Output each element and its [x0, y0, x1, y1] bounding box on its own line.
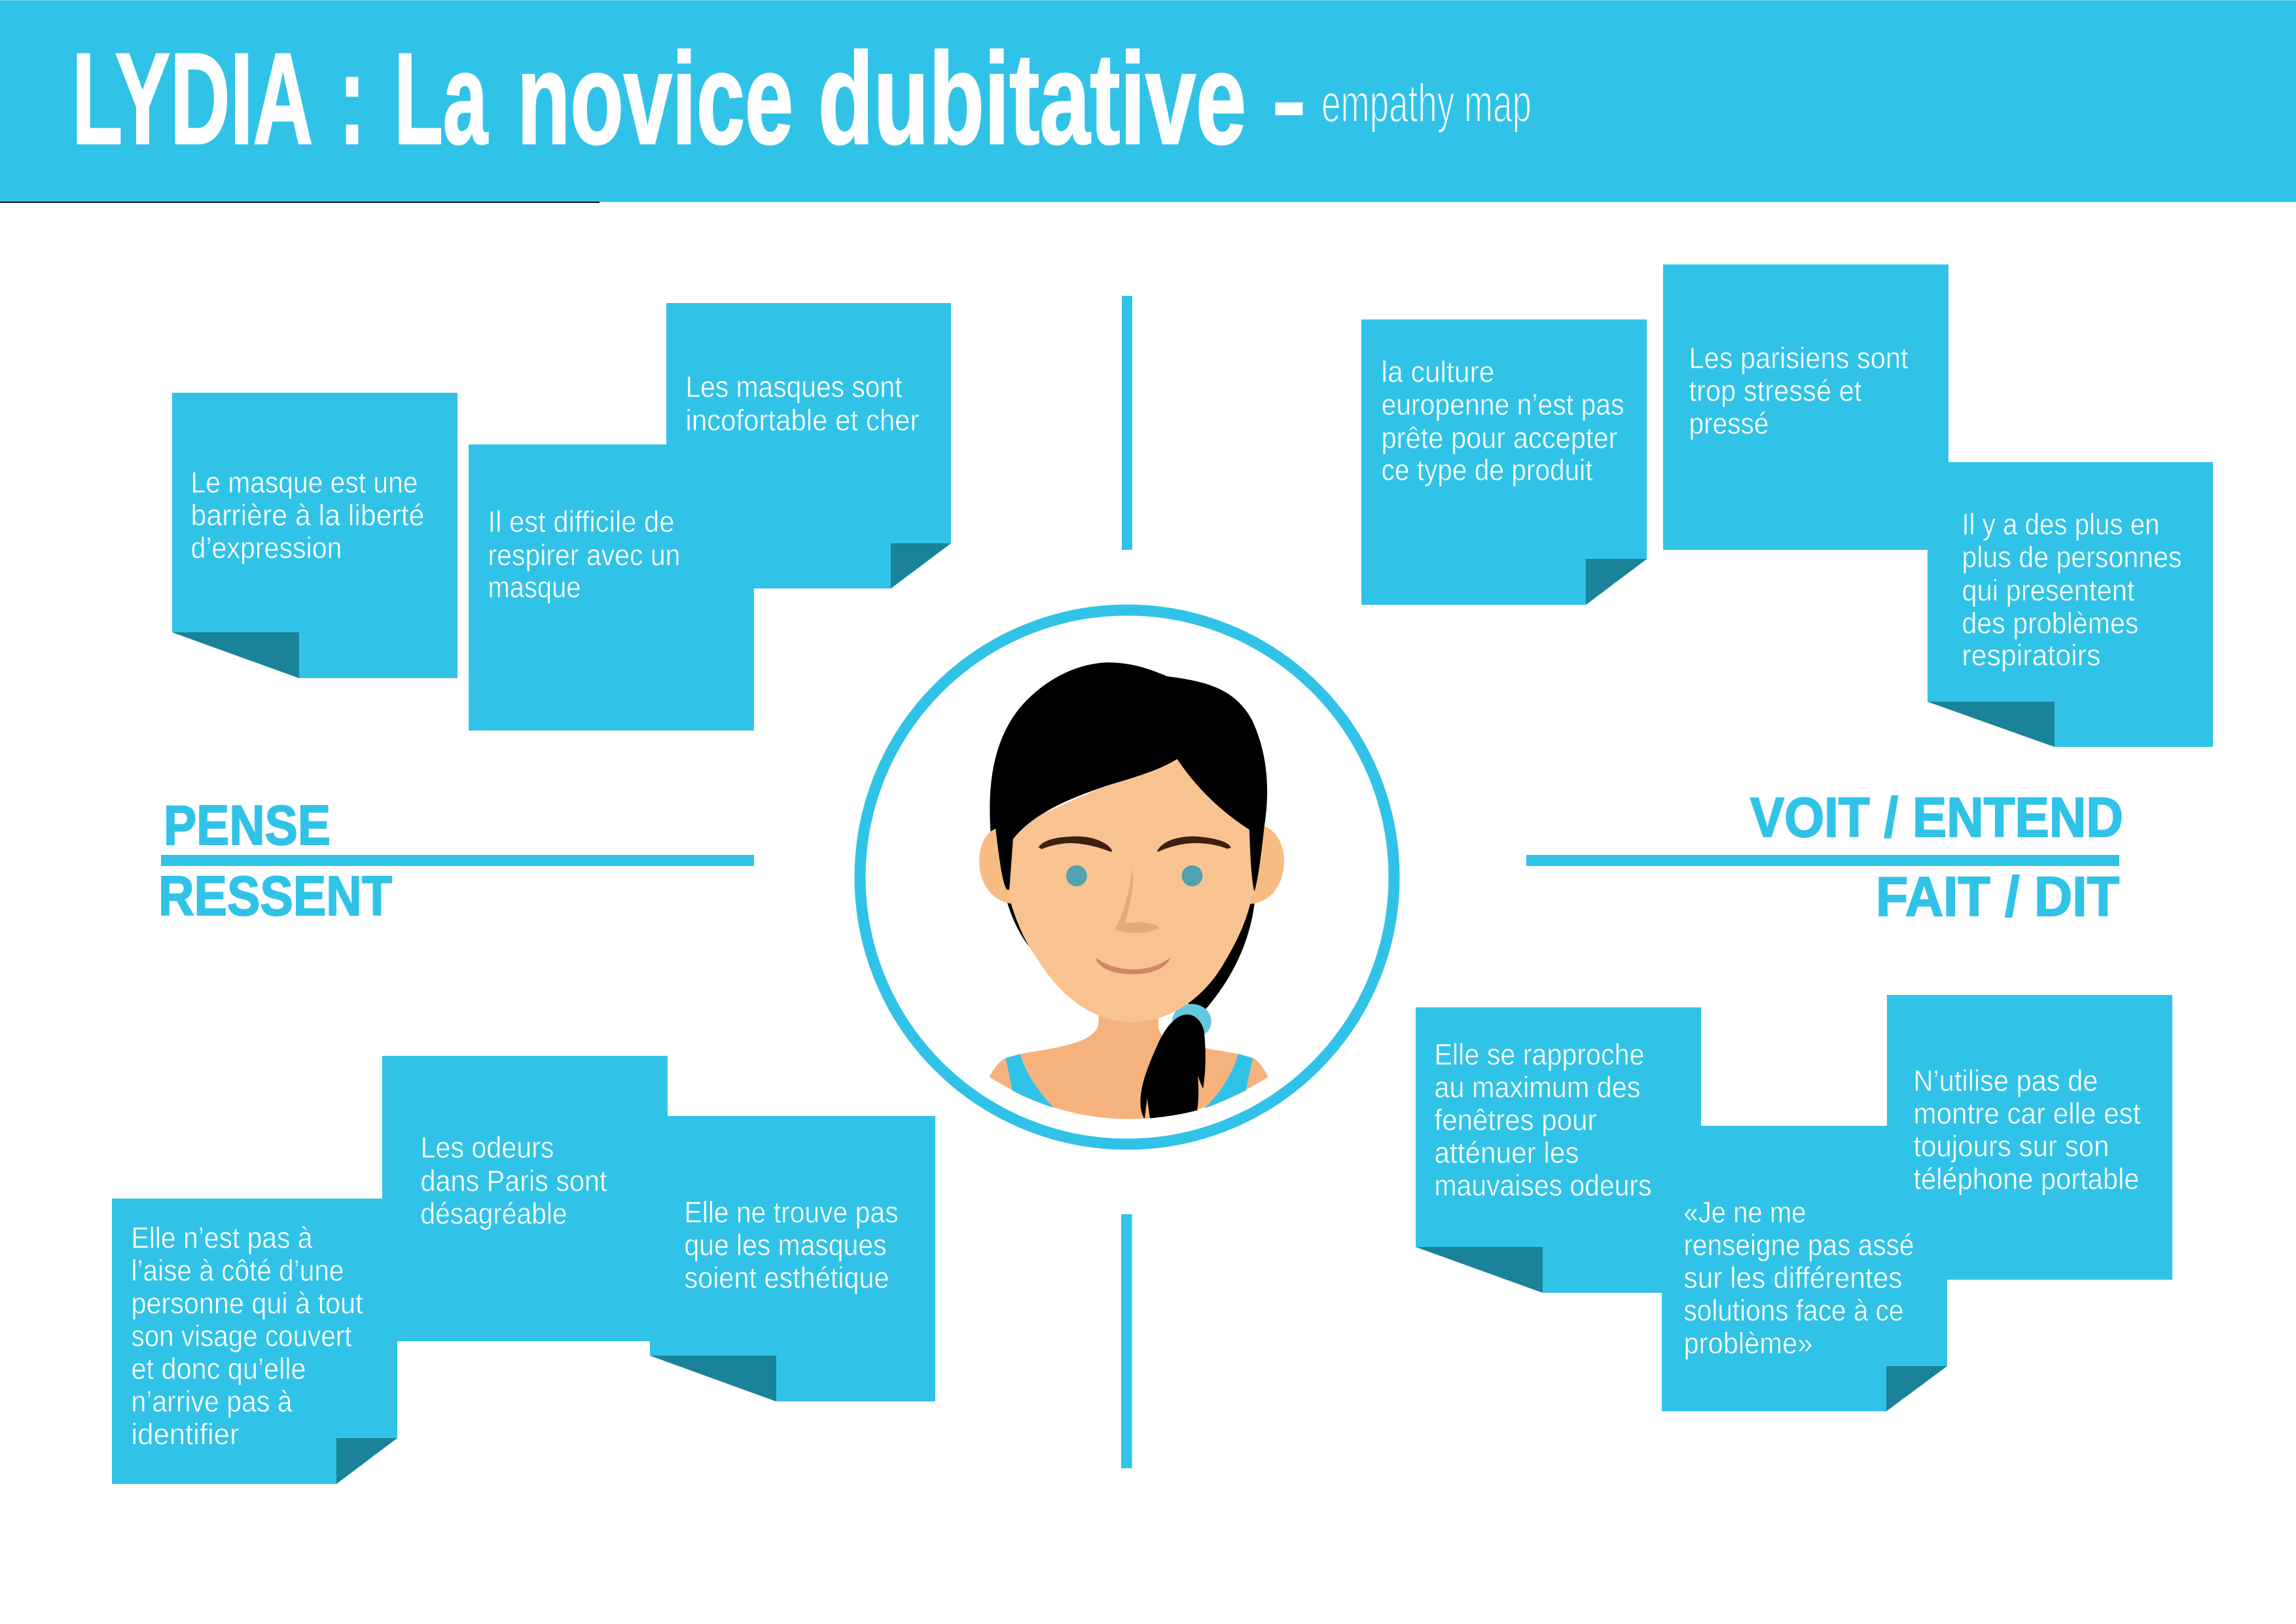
sticky note: le masque est une barriere	[172, 393, 457, 678]
title: :	[339, 26, 365, 171]
heading: voit / entend / fait / dit	[1526, 787, 2123, 928]
note text: soient esthétique	[685, 1261, 889, 1295]
note text: qui presentent	[1962, 573, 2135, 607]
note text: Elle n’est pas à	[131, 1221, 313, 1254]
icon: portrait of Lydia	[979, 662, 1284, 1119]
back hair	[1007, 901, 1255, 1011]
note text	[1689, 342, 1909, 440]
note text	[685, 1195, 898, 1295]
right top strap	[1204, 1054, 1253, 1108]
note text: N’utilise pas de	[1914, 1064, 2098, 1097]
corner fold	[1586, 559, 1647, 605]
corner fold	[1928, 702, 2054, 747]
note text	[686, 370, 919, 437]
neck and shoulders	[989, 1003, 1268, 1119]
sticky note: elle se rapproche	[1416, 1007, 1701, 1293]
panel: pense	[172, 303, 951, 731]
note text: europenne n’est pas	[1381, 388, 1624, 422]
ressent label: RESSENT	[158, 865, 392, 928]
note text: prête pour accepter	[1381, 422, 1618, 454]
note text: Elle se rapproche	[1435, 1038, 1644, 1071]
note text: n’arrive pas à	[131, 1385, 293, 1418]
left eyebrow	[1039, 837, 1113, 852]
voit entend label: VOIT / ENTEND	[1750, 787, 2123, 849]
subtitle: empathy map	[1321, 73, 1532, 134]
title dash: -	[1271, 39, 1307, 160]
note text: des problèmes	[1962, 606, 2139, 640]
note text: trop stressé et	[1689, 374, 1862, 407]
note text	[488, 505, 681, 604]
ponytail	[1140, 1015, 1206, 1119]
sticky note: problemes respiratoirs	[1928, 462, 2213, 747]
note text: sur les différentes	[1683, 1261, 1902, 1295]
note text: d’expression	[191, 532, 342, 564]
note text	[131, 1221, 363, 1451]
sticky note: elle ne trouve pas	[650, 1116, 935, 1401]
note text: plus de personnes	[1962, 541, 2182, 573]
note text	[1962, 508, 2182, 672]
note text: barrière à la liberté	[191, 499, 424, 532]
sticky note: je ne me renseigne pas	[1662, 1126, 1947, 1411]
note text: son visage couvert	[131, 1320, 352, 1352]
note text: problème»	[1683, 1326, 1813, 1360]
title: LYDIA	[72, 26, 313, 171]
note text: atténuer les	[1435, 1136, 1579, 1169]
note text: respiratoirs	[1962, 639, 2101, 672]
sticky note: il est difficile de respirer	[469, 444, 754, 731]
note text: mauvaises odeurs	[1435, 1169, 1652, 1202]
note text	[1381, 355, 1624, 487]
note text: pressé	[1689, 407, 1768, 440]
right ear	[1240, 826, 1284, 904]
note text: «Je ne me	[1683, 1195, 1806, 1229]
note text: ce type de produit	[1381, 453, 1593, 487]
hair tie	[1172, 1004, 1211, 1039]
note text: montre car elle est	[1914, 1097, 2141, 1130]
note text: respirer avec un	[488, 538, 681, 572]
note text	[420, 1131, 607, 1231]
note text: Les parisiens sont	[1689, 342, 1909, 374]
title	[72, 26, 1246, 171]
note text: désagréable	[420, 1197, 567, 1231]
left top strap	[1005, 1054, 1054, 1108]
note text: toujours sur son	[1914, 1130, 2109, 1163]
title: novice	[517, 26, 793, 171]
note text: Il y a des plus en	[1962, 508, 2160, 541]
note text: que les masques	[685, 1228, 886, 1262]
note text: Le masque est une	[191, 466, 418, 499]
heading: pense / ressent	[158, 795, 754, 928]
note text	[1435, 1038, 1652, 1202]
sticky note: les odeurs	[382, 1056, 668, 1341]
note text: Les masques sont	[686, 370, 903, 403]
panel: fait / dit notes	[1416, 995, 2172, 1411]
note text: l’aise à côté d’une	[131, 1254, 344, 1287]
left eye	[1066, 865, 1087, 886]
note text: dans Paris sont	[420, 1164, 607, 1198]
note text: la culture	[1381, 355, 1495, 389]
note text: solutions face à ce	[1683, 1293, 1903, 1327]
sticky note: les parisiens	[1663, 264, 1948, 550]
portrait ring	[860, 610, 1394, 1144]
note text: personne qui à tout	[131, 1287, 363, 1320]
title: dubitative	[818, 26, 1246, 171]
top vertical divider	[1122, 296, 1132, 550]
mouth	[1095, 958, 1170, 974]
sticky note: la culture europenne	[1361, 319, 1647, 605]
note text: renseigne pas assé	[1683, 1228, 1914, 1262]
title: La	[394, 26, 488, 171]
corner fold	[1886, 1366, 1947, 1411]
note text: identifier	[131, 1418, 240, 1451]
sticky note: elle n'est pas a l'aise	[112, 1199, 397, 1484]
face	[1006, 755, 1254, 1022]
note text: incofortable et cher	[686, 403, 919, 437]
header banner	[0, 0, 2296, 203]
note text: et donc qu’elle	[131, 1352, 306, 1385]
note text	[191, 466, 424, 564]
sticky note: les masques sont incofortable	[666, 303, 951, 588]
note text: Les odeurs	[420, 1131, 554, 1164]
panel: voit / entend	[1361, 264, 2213, 747]
corner fold	[1416, 1247, 1543, 1293]
note text	[1914, 1064, 2141, 1195]
fait dit label: FAIT / DIT	[1876, 866, 2119, 928]
left ear	[979, 829, 1023, 904]
right eye	[1182, 865, 1202, 886]
sticky note: n'utilise pas de montre	[1887, 995, 2172, 1280]
nose	[1115, 869, 1159, 933]
note text: au maximum des	[1435, 1071, 1640, 1104]
note text	[1683, 1195, 1914, 1360]
pense label: PENSE	[164, 795, 331, 857]
note text: Il est difficile de	[488, 505, 674, 538]
panel: ressent notes	[112, 1056, 935, 1484]
corner fold	[336, 1438, 397, 1484]
note text: masque	[488, 571, 581, 604]
right eyebrow	[1157, 837, 1231, 852]
front hair	[990, 662, 1267, 892]
corner fold	[891, 543, 951, 588]
note text: fenêtres pour	[1435, 1104, 1597, 1136]
note text: téléphone portable	[1914, 1163, 2139, 1195]
note text: Elle ne trouve pas	[685, 1195, 898, 1229]
bottom vertical divider	[1121, 1214, 1132, 1468]
corner fold	[650, 1356, 776, 1401]
corner fold	[172, 632, 299, 678]
